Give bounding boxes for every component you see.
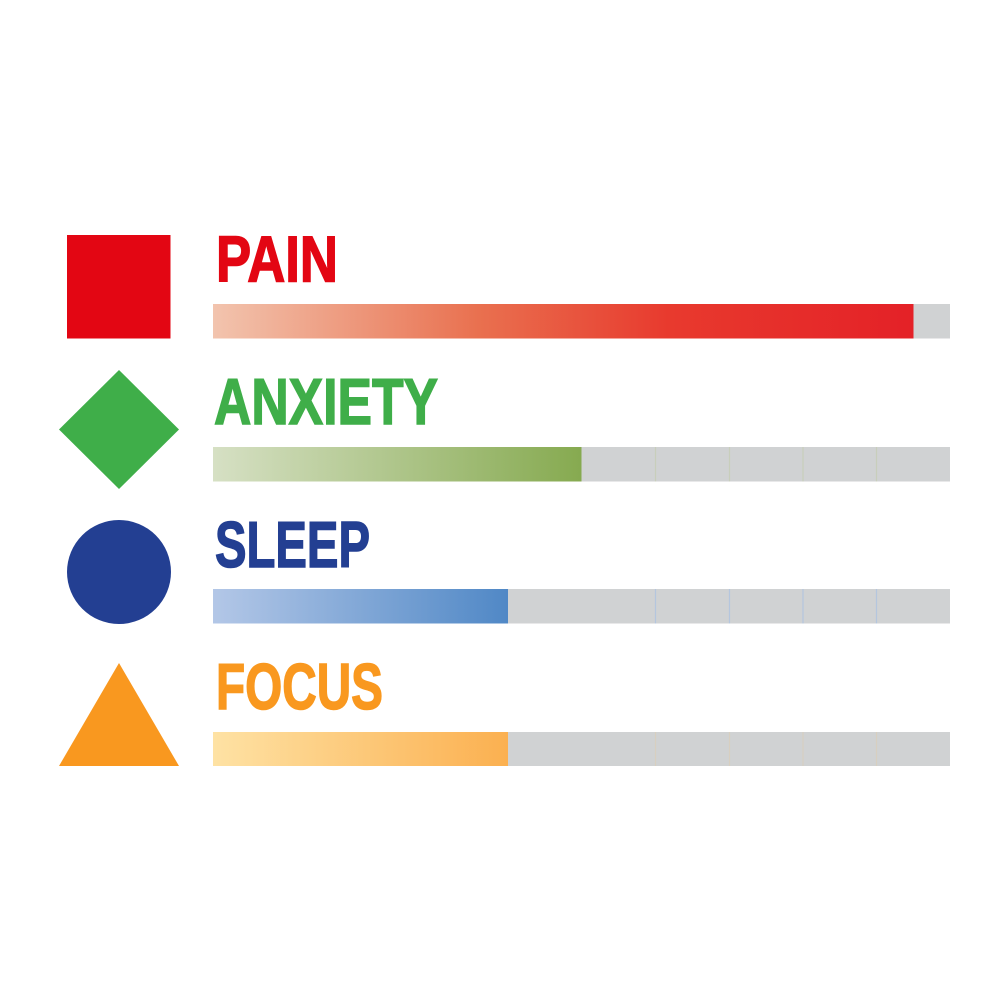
bar: sleep: [213, 589, 950, 624]
bar: anxiety: [213, 447, 950, 482]
icon: blue circle: [67, 520, 171, 624]
icon: green diamond: [59, 370, 179, 489]
row: pain: [67, 222, 950, 338]
heading: anxiety: ANXIETY: [214, 365, 438, 438]
bar: focus: [213, 732, 950, 766]
icon: orange triangle: [59, 663, 179, 766]
heading: sleep: SLEEP: [215, 508, 370, 581]
icon: red square: [67, 235, 170, 338]
heading: focus: FOCUS: [216, 650, 383, 723]
row: sleep: [67, 508, 950, 624]
row: anxiety: [59, 365, 950, 489]
bar: pain: [213, 304, 950, 338]
row: focus: [59, 650, 950, 766]
heading: pain: PAIN: [216, 222, 338, 296]
